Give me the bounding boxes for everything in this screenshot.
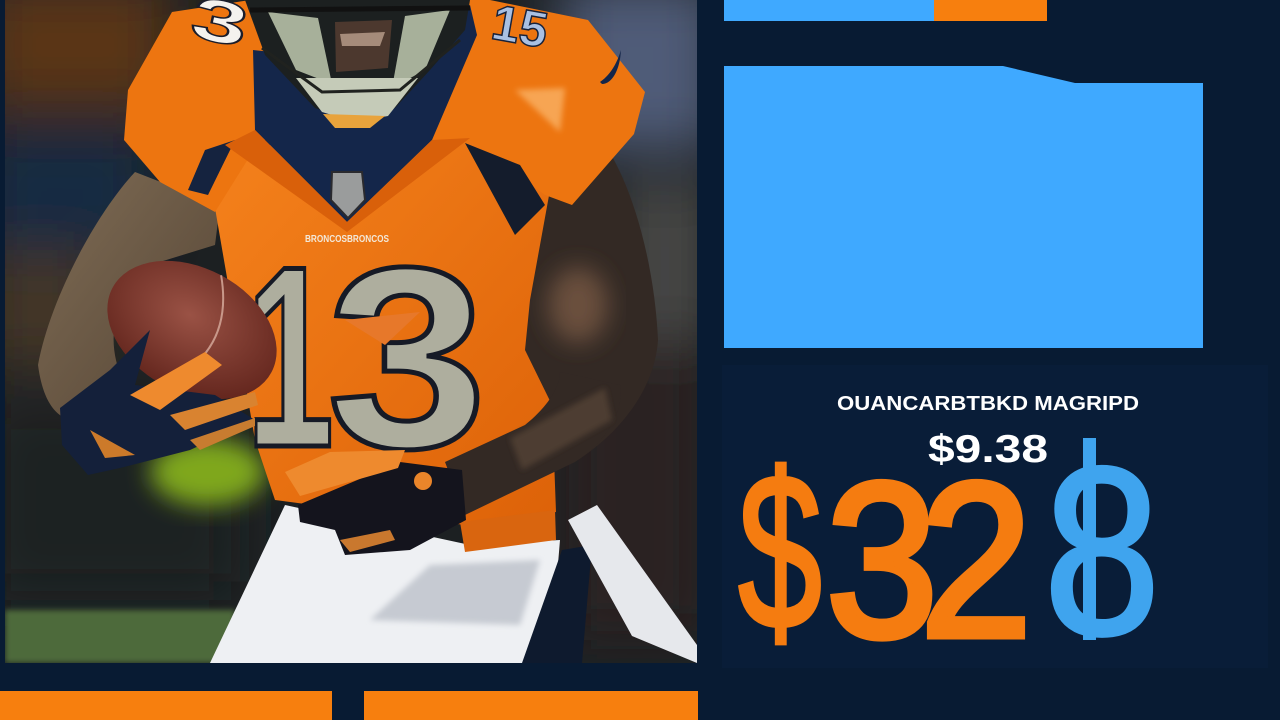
digit 3: 3	[826, 437, 938, 683]
card heading: OUANCARBTBKD MAGRIPD	[837, 392, 1139, 415]
navy side panels	[188, 140, 235, 195]
photo blurred stadium background	[0, 0, 720, 663]
football	[107, 260, 277, 399]
icon: swoosh	[600, 50, 621, 84]
right upper arm	[525, 145, 658, 470]
white flap	[568, 505, 697, 663]
digit 2: 2	[920, 437, 1032, 683]
panel: player photo	[0, 0, 720, 663]
white pants	[210, 505, 560, 663]
secondary value: $9.38	[928, 428, 1048, 471]
left glove	[60, 330, 258, 475]
jersey hem band	[460, 510, 556, 552]
panel: large blue block	[724, 66, 1203, 348]
dollar sign: $	[738, 428, 822, 676]
chest wordmark: BRONCOSBRONCOS	[305, 234, 389, 245]
digit 8 with bar: 8	[1043, 417, 1161, 685]
top color bar	[724, 0, 1047, 21]
jersey number 13	[254, 264, 480, 452]
left arm	[38, 172, 220, 420]
big value	[738, 417, 1161, 685]
shield badge	[331, 172, 365, 218]
navy pant stripe	[522, 545, 592, 663]
jersey torso	[205, 130, 556, 525]
jersey number 13: 1	[246, 212, 334, 501]
player figure	[38, 0, 697, 663]
jersey number 13: 3	[327, 213, 487, 502]
right forearm	[445, 400, 574, 515]
panel: salary card	[722, 365, 1268, 685]
helmet and facemask	[245, 0, 470, 128]
bottom right orange bar	[364, 691, 698, 720]
bottom left orange bar	[0, 691, 332, 720]
jersey shoulders	[124, 0, 645, 212]
navy collar	[253, 5, 477, 222]
right glove	[285, 450, 466, 555]
